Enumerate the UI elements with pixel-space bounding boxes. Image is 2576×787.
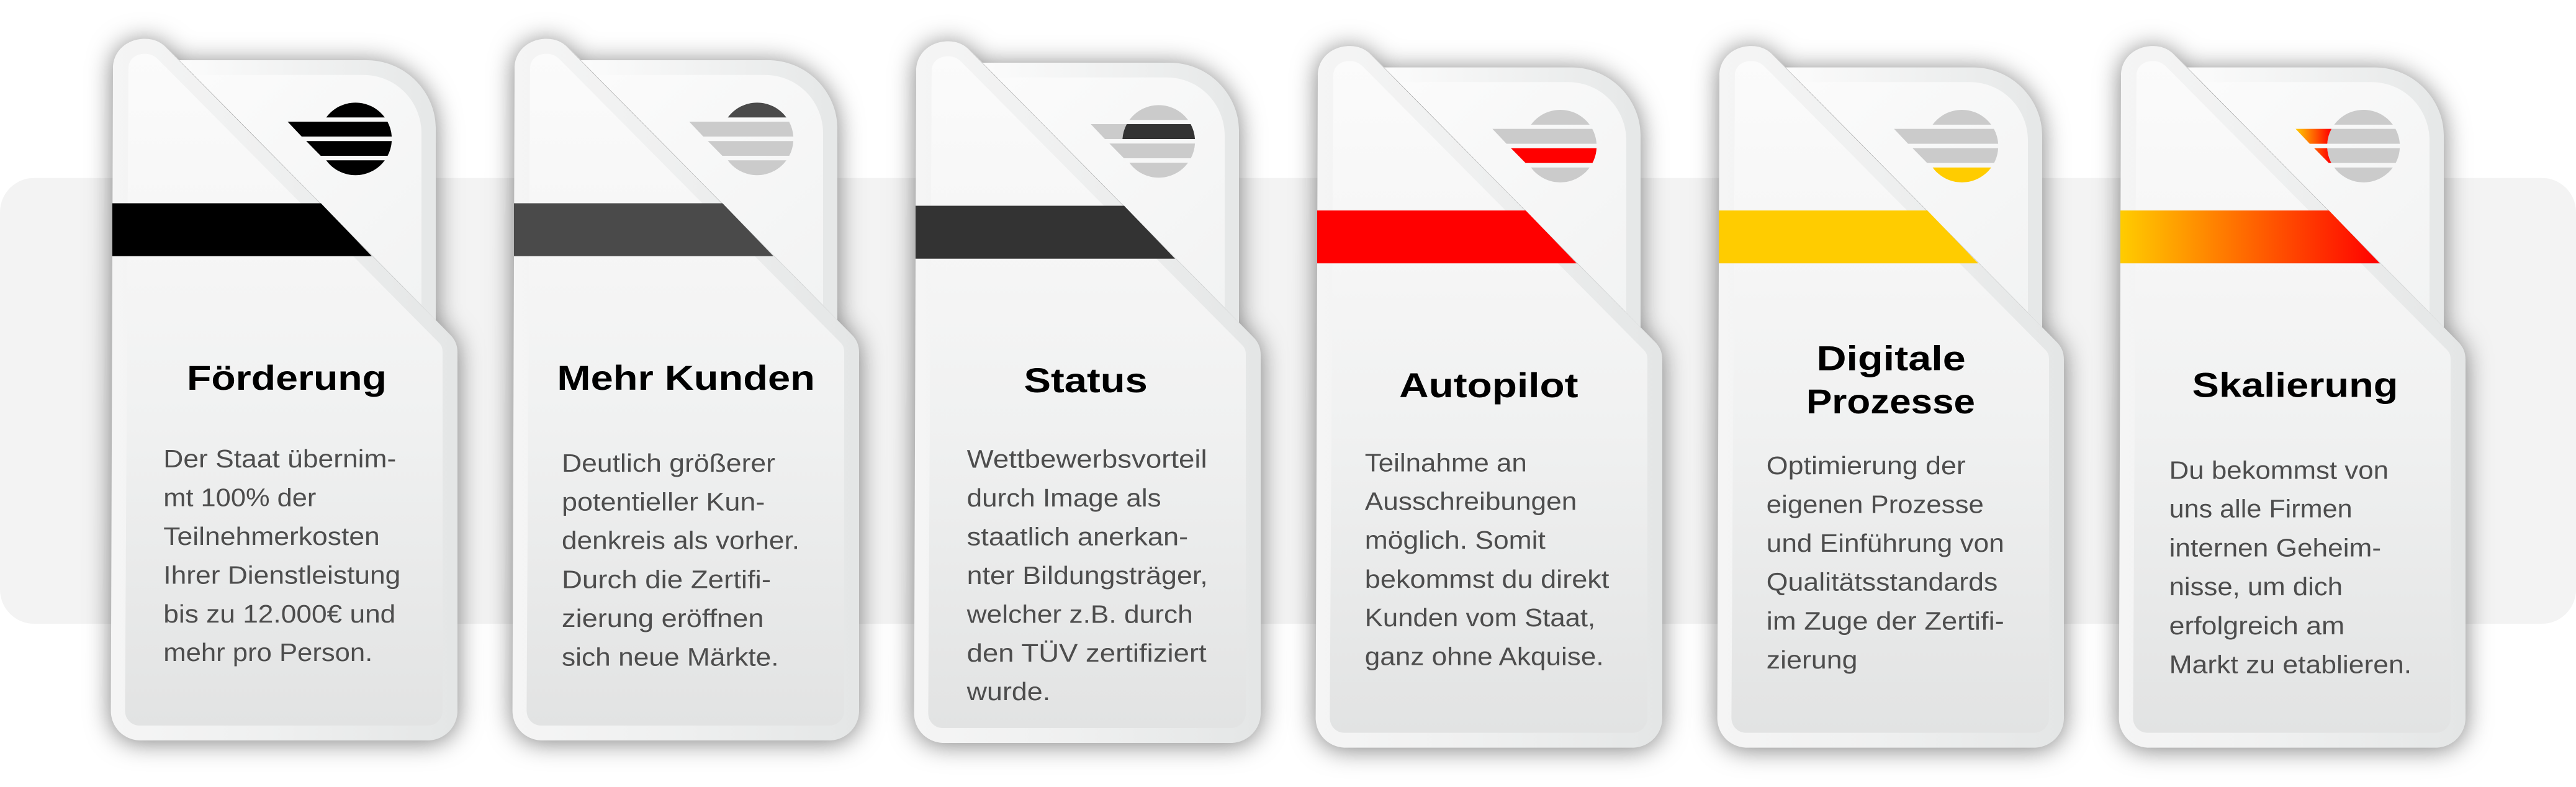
card 1 icon [287, 102, 392, 175]
card 2 body text: zierung eröffnen [562, 604, 763, 632]
card 5 body text: eigenen Prozesse [1767, 490, 1984, 518]
card 4: Autopilot [1316, 46, 1662, 748]
card 4 body text: Teilnahme an [1365, 448, 1527, 477]
card 4 title: Autopilot [1399, 366, 1578, 405]
card 6 colour bar [2120, 210, 2380, 263]
card 1 colour bar [112, 204, 372, 256]
card 5: Digitale Prozesse [1718, 46, 2064, 748]
card 2 colour bar [514, 204, 773, 256]
card 1 body text: bis zu 12.000€ und [163, 600, 395, 628]
card 3 body text: Wettbewerbsvorteil [967, 444, 1207, 473]
card 4 shape [1316, 46, 1662, 748]
card 3 title: Status [1024, 361, 1148, 400]
card 1: Förderung [111, 38, 457, 740]
card 1 body text: mt 100% der [163, 483, 316, 512]
card 6 body text: Du bekommst von [2169, 456, 2389, 484]
card 2 body text: Deutlich größerer [562, 449, 775, 477]
card 6 body text: Markt zu etablieren. [2169, 650, 2412, 678]
card 4 body text [1365, 448, 1610, 671]
card 6 body text: erfolgreich am [2169, 611, 2344, 640]
card 4 body text: ganz ohne Akquise. [1365, 642, 1604, 671]
card 2 shape [513, 38, 859, 740]
card 3 icon [1091, 105, 1195, 178]
card 1 body text: Teilnehmerkosten [163, 522, 380, 551]
card 6: Skalierung [2119, 46, 2466, 748]
card 3 body text: durch Image als [967, 483, 1161, 512]
card 5 body text: und Einführung von [1767, 529, 2004, 557]
card 3 body text: staatlich anerkan- [967, 523, 1188, 551]
card 3 body text: welcher z.B. durch [966, 600, 1193, 629]
card 3 body text: nter Bildungsträger, [967, 561, 1208, 590]
card 2 icon [689, 102, 793, 175]
card 4 icon [1492, 110, 1596, 182]
card 6 body text [2169, 456, 2412, 678]
card 6 icon [2295, 110, 2400, 182]
card 1 body text [163, 444, 400, 667]
card 6 title: Skalierung [2192, 366, 2398, 405]
card 5 body text: Qualitätsstandards [1767, 568, 1997, 596]
card 5 shape [1718, 46, 2064, 748]
card 6 shape [2119, 46, 2466, 748]
card 2 body text: denkreis als vorher. [562, 526, 799, 555]
card 4 body text: Ausschreibungen [1365, 487, 1577, 516]
card 3 body text: den TÜV zertifiziert [967, 639, 1207, 667]
card 5 body text: im Zuge der Zertifi- [1767, 606, 2004, 635]
card 4 body text: bekommst du direkt [1365, 565, 1610, 593]
card 5 title: Prozesse [1806, 382, 1975, 421]
card 5 title: Digitale [1816, 339, 1966, 377]
card 1 shape [111, 38, 457, 740]
card 3 shape [914, 41, 1261, 743]
card 3 colour bar [916, 206, 1175, 259]
card 5 body text [1767, 451, 2004, 674]
card 5 body text: Optimierung der [1767, 451, 1966, 480]
card 2: Mehr Kunden [513, 38, 859, 740]
card 1 body text: Der Staat übernim- [163, 444, 396, 473]
card 5 body text: zierung [1767, 645, 1857, 674]
card 5 icon [1894, 110, 1998, 182]
card 4 body text: Kunden vom Staat, [1365, 603, 1595, 632]
card 5 colour bar [1719, 210, 1978, 263]
card 6 body text: internen Geheim- [2169, 534, 2381, 562]
card 2 body text [562, 449, 799, 672]
card 2 body text: potentieller Kun- [562, 487, 765, 516]
card 5 title [1806, 339, 1975, 421]
card 4 body text: möglich. Somit [1365, 526, 1546, 554]
card 3 body text [966, 444, 1208, 706]
card 1 title: Förderung [187, 358, 387, 397]
card 4 colour bar [1317, 210, 1577, 263]
card 2 body text: sich neue Märkte. [562, 643, 779, 672]
card 3 body text: wurde. [966, 677, 1050, 706]
card 2 body text: Durch die Zertifi- [562, 565, 771, 593]
card 6 body text: nisse, um dich [2169, 572, 2343, 601]
card 1 body text: mehr pro Person. [163, 638, 372, 667]
card 6 body text: uns alle Firmen [2169, 495, 2353, 523]
background panel [0, 178, 2576, 624]
card 1 body text: Ihrer Dienstleistung [163, 561, 400, 590]
card 2 title: Mehr Kunden [557, 358, 815, 397]
card 3: Status [914, 41, 1261, 743]
